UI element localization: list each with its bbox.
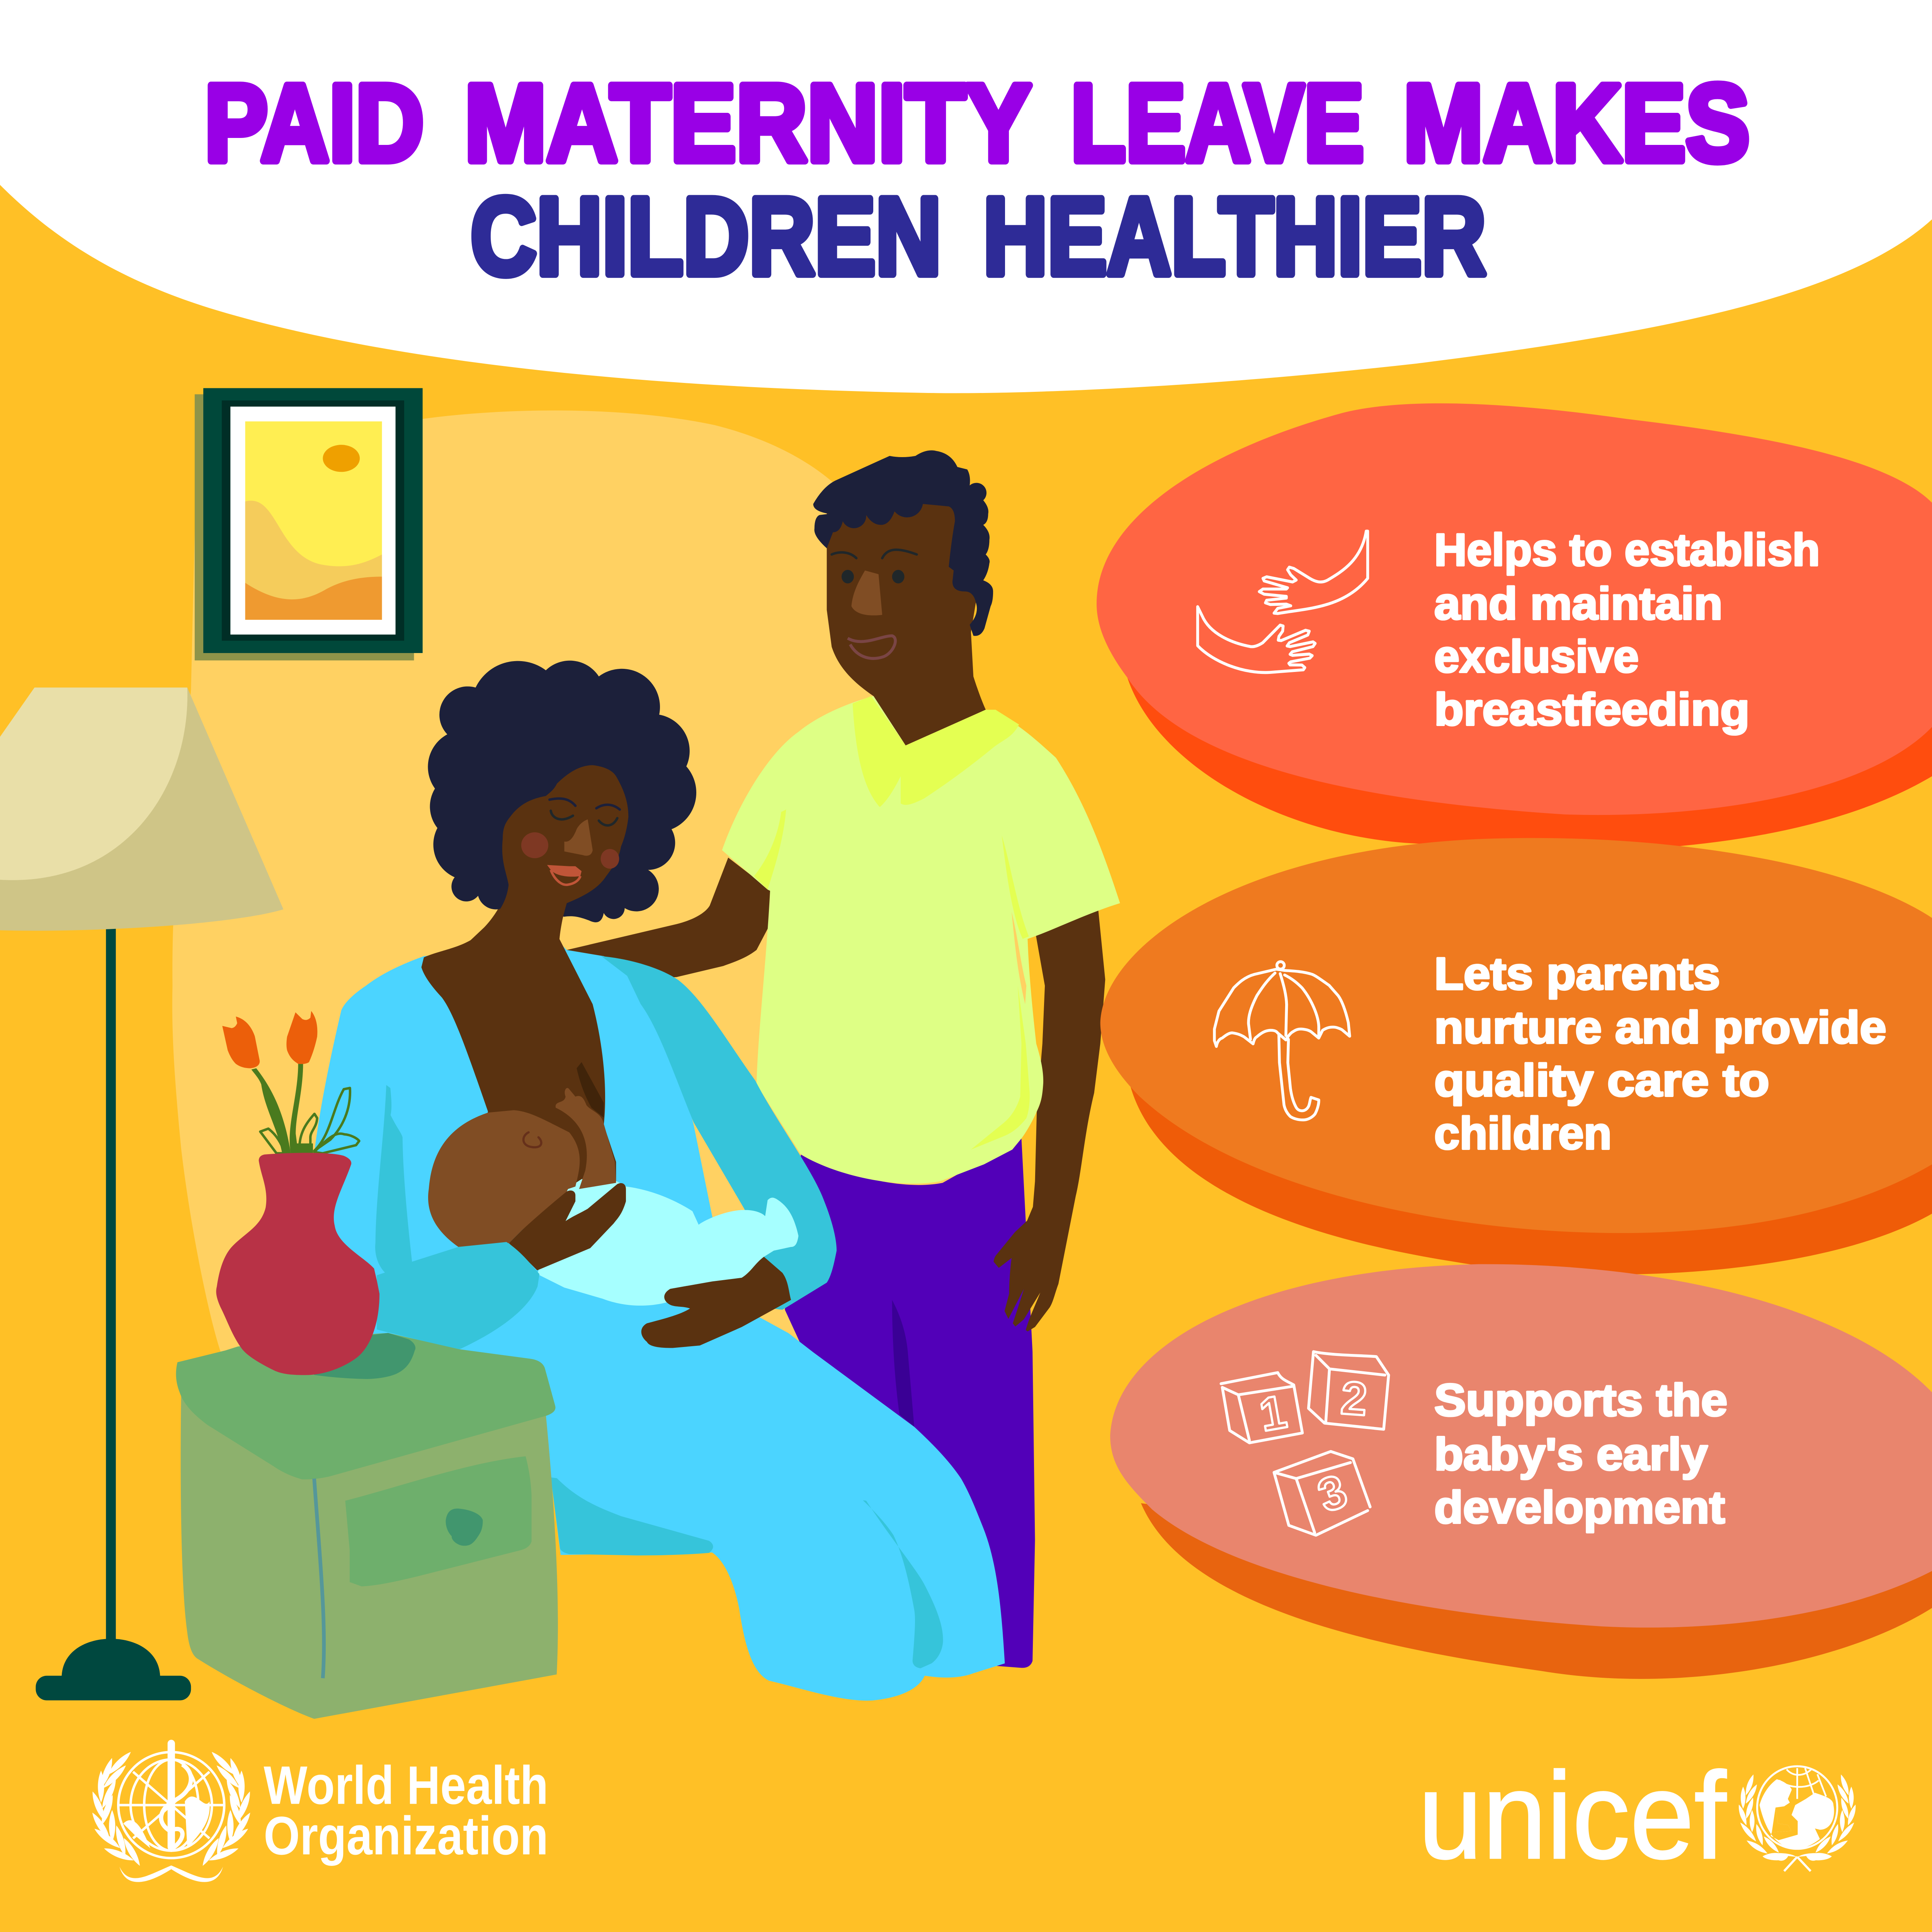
framed picture: [195, 388, 423, 660]
man left arm: [567, 857, 771, 980]
title banner: [0, 0, 1932, 393]
panel text: quality care to: [1434, 1055, 1769, 1106]
shirt folds: [754, 810, 786, 889]
icon: hands: [1197, 531, 1368, 672]
unicef wordmark: unicef: [1418, 1747, 1726, 1884]
title line 1: MAKES: [1403, 62, 1750, 184]
title line 1: PAID: [204, 62, 424, 184]
mother robe: [314, 942, 1005, 1701]
WHO emblem: [90, 1740, 253, 1882]
mother left hand: [509, 1183, 626, 1270]
panel text: children: [1434, 1108, 1612, 1159]
baby ear: [524, 1132, 541, 1147]
mother and baby: [314, 661, 1005, 1701]
panel text: and maintain: [1434, 578, 1723, 629]
vase: [216, 1153, 379, 1375]
icon: toy blocks: [1221, 1352, 1389, 1535]
panel text: breastfeeding: [1434, 684, 1750, 735]
block 2: 2: [1339, 1371, 1369, 1425]
man collar: [853, 696, 1019, 807]
block 3: [1274, 1451, 1370, 1535]
tulip 2: [286, 1011, 317, 1064]
seat shadow: [551, 1477, 713, 1556]
flowers: [222, 1011, 359, 1155]
panel text: Supports the: [1434, 1375, 1728, 1426]
block 2: [1308, 1352, 1389, 1429]
WHO wordmark: [264, 1755, 548, 1866]
icon: umbrella: [1214, 962, 1350, 1120]
title line 1: MATERNITY: [464, 62, 1031, 184]
panel: breastfeeding: [1097, 403, 1932, 851]
title line 2: CHILDREN: [471, 175, 941, 298]
mother hair: [428, 661, 696, 922]
title line 1: LEAVE: [1071, 62, 1364, 184]
man right arm: [993, 906, 1105, 1332]
unicef emblem: [1736, 1766, 1858, 1871]
man shirt: [722, 696, 1120, 1184]
title line 2: [471, 175, 1486, 298]
floor lamp: [0, 687, 283, 1701]
panel text: [1434, 525, 1820, 735]
chest shading: [577, 1062, 604, 1117]
block 1: 1: [1255, 1385, 1290, 1441]
mother right sleeve: [601, 956, 837, 1310]
tulip 1: [222, 1017, 260, 1068]
baby head: [428, 1110, 580, 1247]
mother chest and neck: [422, 881, 616, 1232]
man: [567, 450, 1120, 1668]
baby arm: [556, 1088, 616, 1189]
robe knee fold: [863, 1500, 943, 1668]
logo: World Health Organization: [90, 1740, 548, 1882]
title line 1: [204, 62, 1750, 184]
block 3: 3: [1311, 1464, 1354, 1522]
panel: development: [1110, 1264, 1932, 1679]
panel text: Lets parents: [1434, 949, 1720, 1000]
logo: unicef: [1418, 1747, 1858, 1884]
man face: [832, 550, 917, 658]
man hair: [813, 450, 993, 636]
man trousers: [785, 1138, 1035, 1668]
panel text: [1434, 949, 1886, 1159]
white header shape: [0, 0, 1932, 393]
panel text: [1434, 1375, 1728, 1533]
WHO wordmark: Organization: [264, 1805, 548, 1866]
baby body: [537, 1177, 798, 1306]
man head and neck: [827, 493, 986, 745]
panel text: baby's early: [1434, 1429, 1708, 1480]
bedside table: [176, 1333, 558, 1719]
panel: nurture: [1100, 838, 1932, 1274]
panel text: nurture and provide: [1434, 1002, 1886, 1053]
mother face: [471, 765, 628, 940]
panel text: Helps to establish: [1434, 525, 1820, 576]
panel text: development: [1434, 1482, 1725, 1533]
block 1: [1221, 1372, 1303, 1443]
room background blob: [172, 410, 1023, 1352]
panel text: exclusive: [1434, 631, 1639, 682]
mother left sleeve: [375, 1085, 539, 1350]
WHO wordmark: World Health: [264, 1755, 548, 1815]
mother right hand: [641, 1257, 791, 1348]
stems and leaves: [252, 1063, 359, 1155]
title line 2: HEALTHIER: [983, 175, 1486, 298]
